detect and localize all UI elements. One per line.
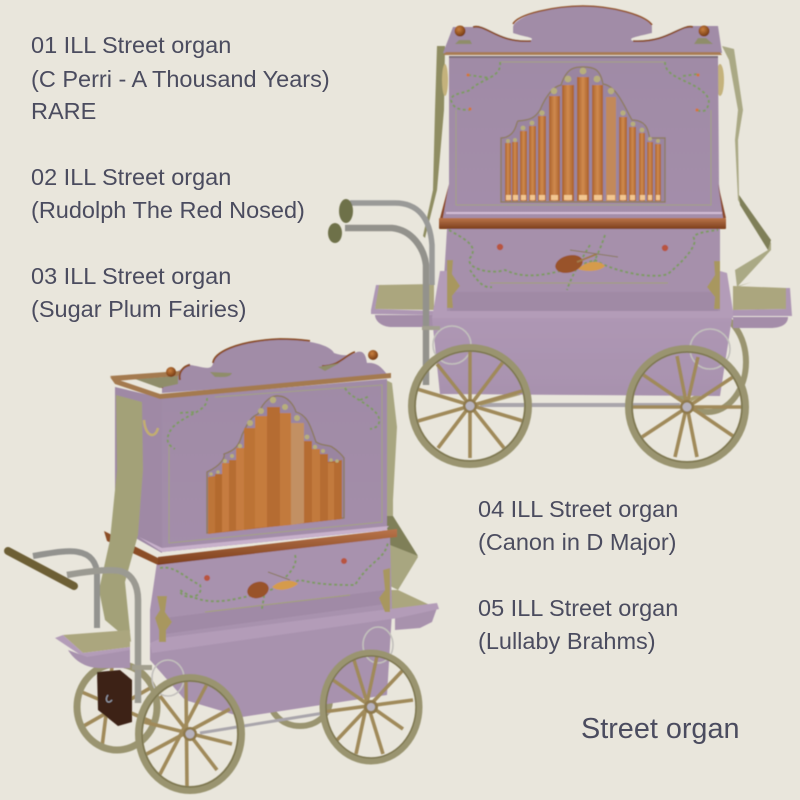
- track list: tracks 01 to 03: 03 ILL Street organ: [31, 263, 231, 289]
- pipe caps: [209, 397, 339, 476]
- street organ, front view (top right): [328, 6, 792, 465]
- rear handle: [350, 203, 432, 285]
- finial knobs: [166, 367, 176, 377]
- brown ledge: [158, 529, 397, 565]
- rear handle: [33, 551, 97, 628]
- lute motif: [553, 250, 618, 276]
- track list: tracks 04 and 05: [478, 496, 678, 654]
- track list: tracks 01 to 03: 02 ILL Street organ: [31, 164, 231, 190]
- upper case: [443, 58, 723, 218]
- painted line: [490, 282, 668, 284]
- axle: [480, 403, 680, 407]
- track list: tracks 04 and 05: 04 ILL Street organ: [478, 496, 678, 522]
- far wheel left: [77, 664, 157, 750]
- right tray: [733, 286, 792, 328]
- red flowers: [497, 244, 668, 251]
- vines: [168, 388, 379, 449]
- corner brackets: [447, 260, 720, 309]
- far wheel right: [270, 674, 330, 726]
- left tray: [55, 630, 130, 668]
- lower case shadow: [165, 590, 385, 634]
- painted line: [205, 595, 350, 612]
- track list: tracks 04 and 05: (Canon in D Major): [478, 529, 677, 555]
- rings: [152, 627, 393, 696]
- left tray: [371, 284, 434, 327]
- finial knobs: [454, 26, 466, 36]
- track list: tracks 01 to 03: (C Perri - A Thousand Years): [31, 66, 330, 92]
- pipe feet glow: [506, 195, 660, 200]
- moulding highlight: [139, 526, 389, 552]
- right strap: [385, 380, 418, 590]
- track list: tracks 04 and 05: (Lullaby Brahms): [478, 628, 656, 654]
- lower case: [442, 229, 720, 311]
- side handle rings: [442, 64, 724, 96]
- back wheel: [670, 312, 746, 412]
- lower case vines: [449, 230, 718, 290]
- left strap: [99, 395, 143, 642]
- painted border: [169, 385, 382, 543]
- lute motif: [245, 572, 298, 601]
- back wheel spokes: [480, 393, 700, 404]
- moulding highlight: [446, 212, 722, 214]
- track list: tracks 01 to 03: RARE: [31, 98, 96, 124]
- caption: Street organ: [581, 713, 739, 745]
- pipe rank: [501, 67, 665, 202]
- crest top board: [443, 6, 722, 53]
- cart box: [432, 318, 732, 396]
- front handle: [345, 228, 426, 385]
- handle grips: [328, 199, 353, 243]
- top side rim: [110, 377, 160, 399]
- wheel: front right: [323, 653, 419, 761]
- crest scrolls: [472, 26, 532, 41]
- brown ledge: [439, 218, 726, 229]
- track list: tracks 01 to 03: 01 ILL Street organ: [31, 32, 231, 58]
- crest board: [162, 339, 388, 393]
- top rim: [110, 371, 180, 381]
- street organ, angled view (bottom left): [8, 339, 439, 790]
- handle grip: [8, 551, 74, 586]
- corner brackets: [155, 568, 390, 642]
- hook: [144, 420, 158, 435]
- front handle: [67, 570, 138, 703]
- track list: tracks 01 to 03: (Rudolph The Red Nosed): [31, 197, 305, 223]
- wheel rings: [433, 326, 730, 369]
- track list: tracks 01 to 03: [31, 32, 330, 322]
- moulding sides: [440, 184, 726, 218]
- painted border: [456, 62, 711, 205]
- left strap: [423, 46, 445, 238]
- pipe rank: [207, 396, 344, 534]
- pipe frame: [501, 67, 665, 202]
- upper front panel: [162, 379, 387, 552]
- moulding side: [104, 531, 158, 565]
- wheel: front right: [629, 349, 745, 465]
- top trim: [443, 52, 722, 55]
- track list: tracks 01 to 03: (Sugar Plum Fairies): [31, 296, 246, 322]
- track list: tracks 04 and 05: 05 ILL Street organ: [478, 595, 678, 621]
- leather bag: [97, 670, 132, 726]
- lower case and cart box: [150, 536, 392, 717]
- lower vines: [160, 542, 388, 610]
- right strap: [722, 46, 771, 287]
- wheel: front left: [139, 678, 241, 790]
- red flowers: [204, 558, 347, 581]
- vines on upper case: [451, 62, 709, 111]
- axle: [200, 712, 330, 733]
- wheel: front left: [412, 348, 528, 464]
- cart rail: [150, 603, 439, 653]
- far inner rim: [135, 376, 178, 388]
- upper side panel: [115, 387, 162, 553]
- right tray: [388, 590, 437, 630]
- pipe frame: [207, 396, 344, 533]
- pipe caps: [506, 68, 660, 143]
